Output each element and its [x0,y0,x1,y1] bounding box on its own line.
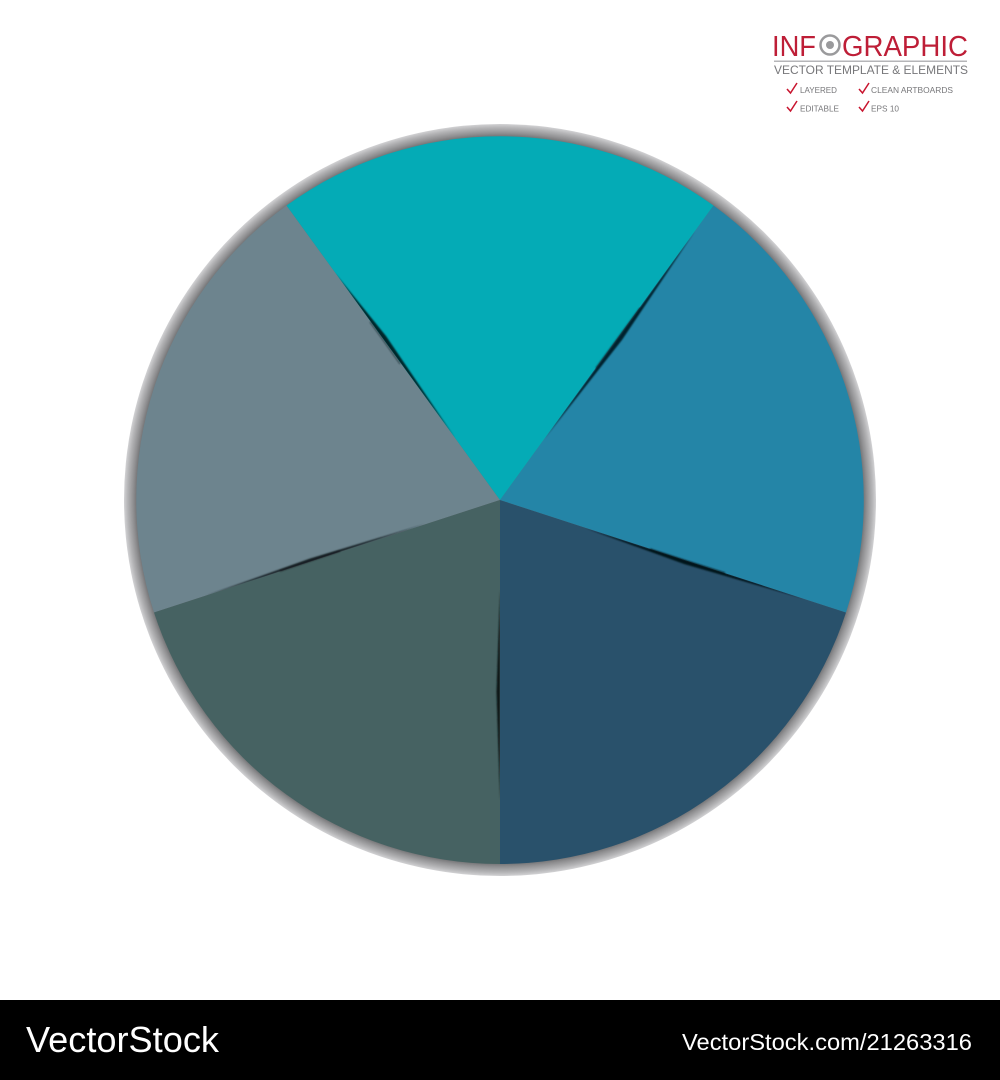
footer brand: VectorStock [26,1019,220,1060]
pie chart [124,124,876,876]
logo block [772,31,968,114]
logo title [772,31,968,63]
check: layered: LAYERED [800,85,837,95]
fold dark core: blue and navy [650,549,725,573]
fold shadow: navy edge onto green [496,590,500,800]
fold shadow: teal edge onto blue [545,231,695,438]
fold shadow: green edge onto grey [205,524,425,596]
check: clean artboards: CLEAN ARTBOARDS [871,85,953,95]
check: editable: EDITABLE [800,104,839,114]
fold dark core: grey and teal [370,322,400,364]
logo rule [774,60,967,62]
logo title: GRAPHIC [842,31,968,63]
logo title: INF [772,31,816,63]
fold shadow: grey edge onto teal [335,273,455,438]
footer bar [0,1000,1000,1080]
segment: blue [500,206,864,612]
pie outer shadow ring [124,124,876,876]
logo subtitle: VECTOR TEMPLATE & ELEMENTS [774,63,968,77]
check: editable [787,101,839,114]
segment: dark green-grey [154,500,500,864]
fold dark core: green and grey [280,551,340,571]
logo icon: target O [820,36,840,54]
segment: grey [136,206,500,612]
check: eps 10: EPS 10 [871,104,899,114]
check: layered [787,83,837,95]
fold shadow: blue edge onto navy [585,528,805,599]
footer url: VectorStock.com/21263316 [682,1029,972,1055]
fold dark core: teal and blue [596,308,640,368]
segment: navy [500,500,846,864]
segment: teal [286,136,714,500]
check: eps 10 [859,101,899,114]
